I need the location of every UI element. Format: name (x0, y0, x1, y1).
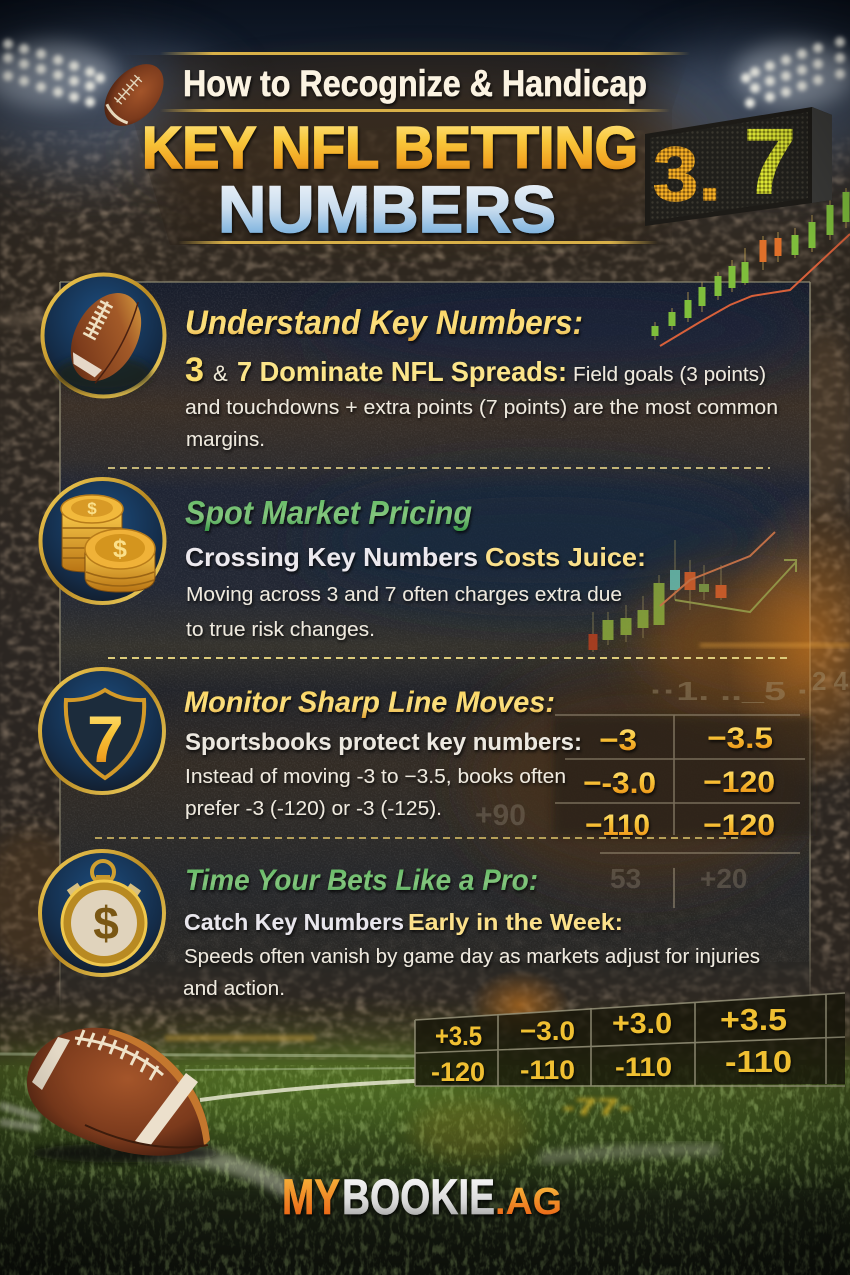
floodlights right (735, 37, 850, 108)
candlestick chart middle right (593, 532, 796, 652)
subheading with inline body: 7 Dominate NFL Spreads: (237, 356, 567, 387)
section 4 (40, 851, 760, 1000)
subheading with inline body: & (213, 361, 228, 386)
icon: shield seven badge: 7 (87, 702, 124, 776)
body text: Instead of moving -3 to −3.5, books often (185, 766, 566, 788)
icon: football badge (42, 274, 164, 396)
faded market figures: 2 4 (812, 666, 849, 696)
faded market figures: +20 (700, 863, 748, 894)
orange glow at right edge (700, 490, 850, 790)
odds table bottom right: −3.0 (520, 1016, 575, 1046)
blurred figures beneath table: -77- (562, 1094, 632, 1121)
content panel (59, 280, 850, 1012)
logo: MY (282, 1169, 340, 1225)
title block (120, 52, 690, 246)
candlestick chart top right (655, 188, 850, 346)
body text: and touchdowns + extra points (7 points) are the most common (185, 397, 778, 419)
logo: .AG (495, 1181, 562, 1223)
odds table bottom right: -120 (431, 1057, 485, 1087)
section 1 (42, 274, 778, 451)
odds table middle right: −3 (599, 724, 637, 757)
odds table bottom right: -110 (520, 1055, 575, 1085)
odds table bottom right: -110 (615, 1052, 672, 1082)
faded market figures: +90 (475, 799, 526, 832)
heading: monitor sharp line moves: Monitor Sharp Line Moves: (184, 686, 555, 719)
icon: coins badge: $ (87, 499, 97, 518)
body text: Moving across 3 and 7 often charges extra due (186, 584, 622, 606)
faded market figures: 53 (610, 863, 641, 894)
subheading: Sportsbooks protect key numbers: (185, 729, 582, 756)
odds table middle right: −120 (703, 766, 775, 799)
body text: to true risk changes. (186, 619, 375, 641)
title line 1: How to Recognize & Handicap (183, 63, 647, 104)
title line 2: KEY NFL BETTING (142, 115, 638, 181)
icon: header football (93, 53, 175, 137)
odds table middle right: −120 (703, 809, 775, 842)
section divider 1 (108, 467, 770, 469)
section divider 2 (108, 657, 790, 659)
subheading with inline body: Field goals (3 points) (573, 364, 766, 386)
icon: shield seven badge (40, 669, 164, 793)
heading: understand key numbers: Understand Key Numbers: (185, 304, 583, 342)
logo: BOOKIE (342, 1169, 495, 1225)
body text: Speeds often vanish by game day as markets adjust for injuries (184, 946, 760, 968)
body text: prefer -3 (-120) or -3 (-125). (185, 798, 442, 820)
subheading: Catch Key Numbers (184, 909, 404, 935)
scoreboard digit 7: 7 (744, 111, 796, 213)
scoreboard digit 3: 3. (653, 132, 721, 217)
icon: football on field (27, 1028, 220, 1163)
subheading: Crossing Key Numbers (185, 542, 478, 572)
odds table middle right: −-3.0 (583, 767, 656, 800)
odds table middle right (553, 715, 813, 908)
football field (0, 970, 850, 1275)
odds table middle right: −110 (585, 809, 650, 842)
floodlights left (0, 39, 115, 107)
section divider 3 (95, 837, 740, 839)
heading: spot market pricing: Spot Market Pricing (185, 494, 472, 531)
icon: stopwatch badge: $ (93, 897, 119, 949)
odds table bottom right: +3.5 (435, 1021, 482, 1051)
scoreboard (645, 107, 832, 226)
subheading with inline body: 3 (185, 351, 204, 389)
icon: stopwatch badge (40, 851, 164, 975)
subheading: Early in the Week: (408, 909, 623, 935)
faded market figures: ··1. .._5 · (650, 676, 810, 706)
section 3 (40, 669, 582, 820)
odds table bottom right (415, 993, 845, 1121)
heading: time your bets: Time Your Bets Like a Pro: (185, 864, 538, 897)
section 2 (40, 479, 646, 641)
odds table bottom right: +3.0 (612, 1008, 672, 1040)
icon: coins badge (40, 479, 164, 603)
faded market figures (475, 666, 849, 894)
odds table bottom right: -110 (725, 1044, 792, 1079)
title line 3: NUMBERS (218, 172, 556, 246)
body text: and action. (183, 978, 285, 1000)
odds table bottom right: +3.5 (720, 1002, 787, 1037)
icon: coins badge: $ (113, 535, 127, 563)
odds table middle right: −3.5 (707, 722, 773, 755)
body text: margins. (186, 429, 265, 451)
subheading: Costs Juice: (485, 542, 646, 572)
